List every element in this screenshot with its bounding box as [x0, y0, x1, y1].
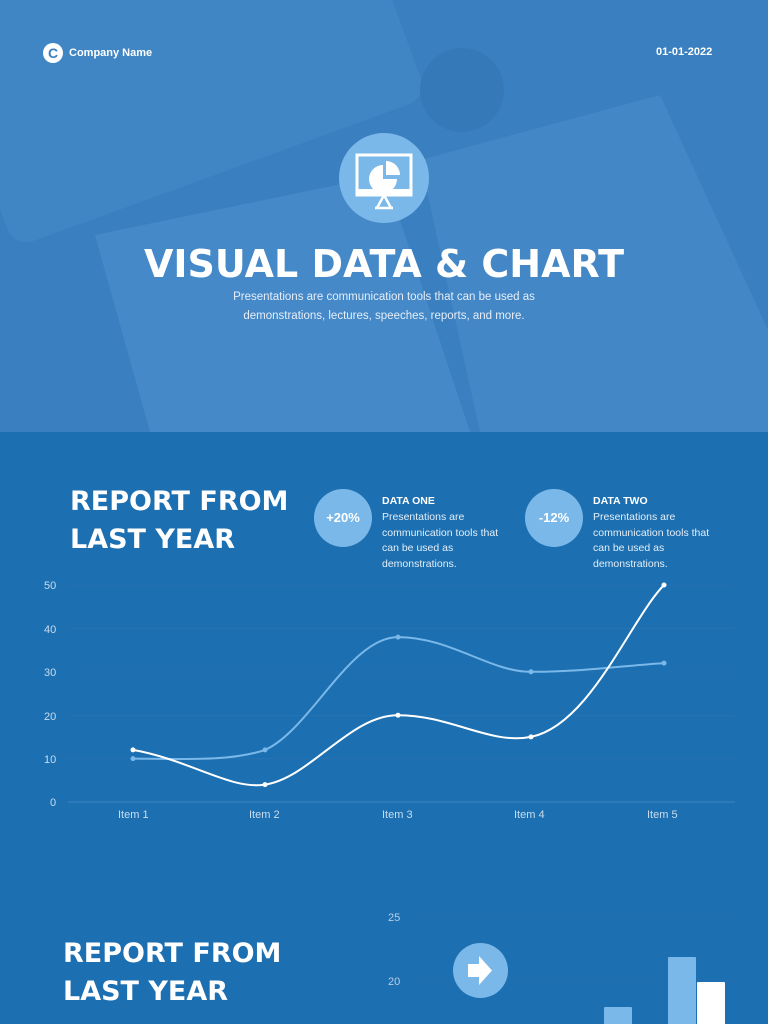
line chart: 10 [44, 754, 56, 766]
logo [43, 43, 152, 63]
line chart: 50 [44, 580, 56, 592]
line chart: Item 1 [118, 809, 149, 821]
heading: report 1: REPORT FROM [70, 486, 288, 517]
line chart [44, 580, 735, 821]
bar chart [388, 912, 725, 1024]
date: 01-01-2022 [656, 46, 712, 58]
stat: data one: +20% [326, 510, 360, 525]
line chart: Item 4 [514, 809, 545, 821]
stat: data one: DATA ONE [382, 495, 435, 507]
stat: data two: DATA TWO [593, 495, 648, 507]
heading: report 1 [70, 486, 288, 555]
bar chart: 25 [388, 912, 400, 924]
stat: data two [525, 489, 710, 570]
heading: report 2: REPORT FROM [63, 938, 281, 969]
icon: presentation chart [339, 133, 429, 223]
stat: data two: -12% [539, 510, 569, 525]
subtitle: Presentations are communication tools that can be used as [233, 291, 535, 303]
logo: Company Name [69, 47, 152, 59]
subtitle [233, 291, 535, 322]
line chart: 0 [50, 797, 56, 809]
bar chart: 20 [388, 976, 400, 988]
logo: C [48, 45, 58, 61]
title: VISUAL DATA & CHART [144, 242, 624, 286]
line chart: 20 [44, 711, 56, 723]
line chart: 30 [44, 667, 56, 679]
heading: report 1: LAST YEAR [70, 524, 235, 555]
icon: arrow circle [453, 943, 508, 998]
subtitle: demonstrations, lectures, speeches, reports, and more. [243, 310, 525, 322]
header banner [0, 0, 768, 432]
line chart: Item 3 [382, 809, 413, 821]
stat: data one: Presentations are communication tools that can be used as demonstrations. [382, 511, 498, 570]
line chart: 40 [44, 624, 56, 636]
heading: report 2 [63, 938, 281, 1007]
stat: data one [314, 489, 498, 570]
stat: data two: Presentations are communication tools that can be used as demonstrations. [593, 511, 709, 570]
heading: report 2: LAST YEAR [63, 976, 228, 1007]
line chart: Item 5 [647, 809, 678, 821]
line chart: Item 2 [249, 809, 280, 821]
